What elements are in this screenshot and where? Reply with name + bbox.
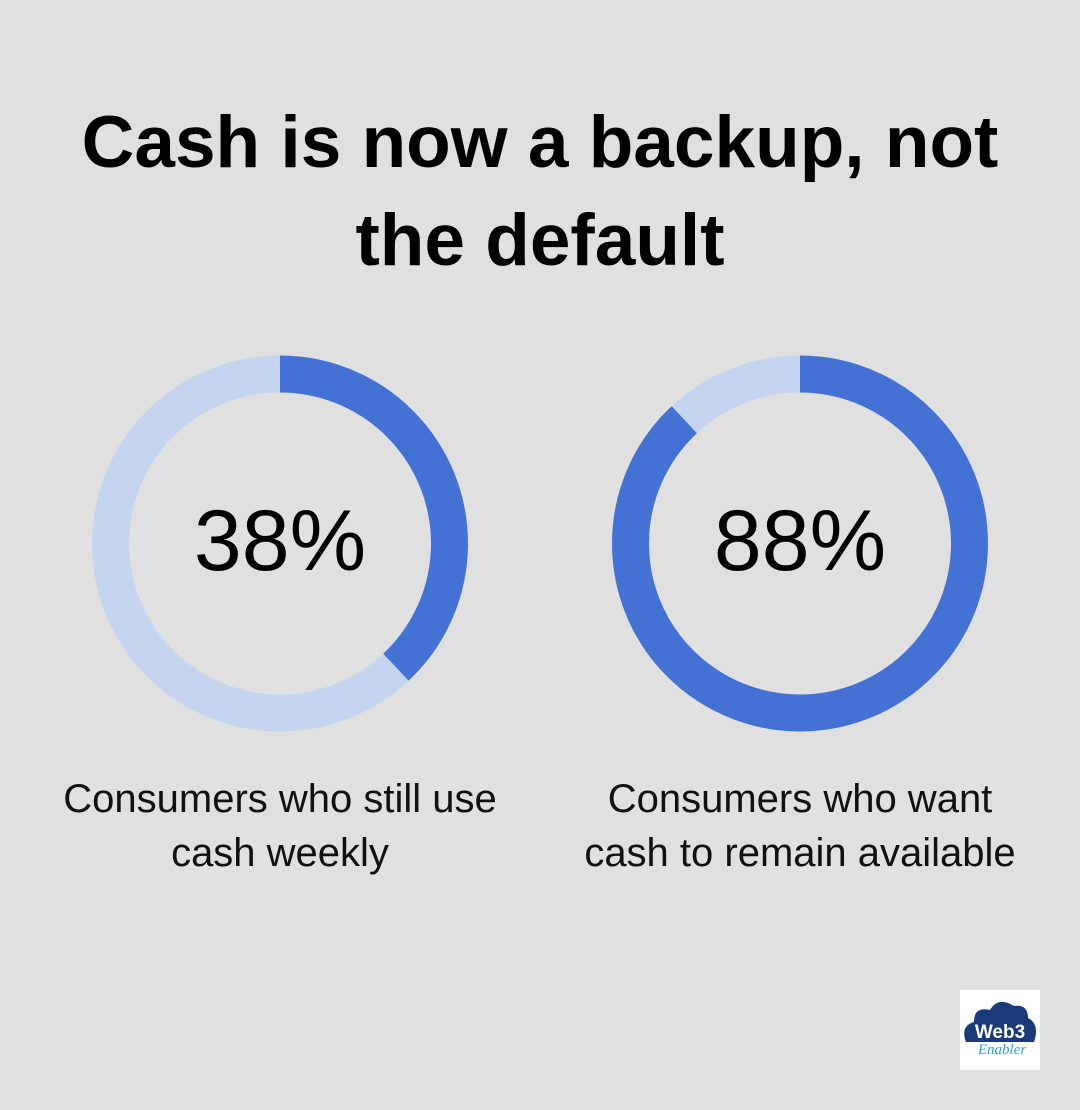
label: left: Consumers who still use (63, 777, 497, 821)
label: right: Consumers who want (608, 777, 992, 821)
label: right (584, 777, 1016, 875)
donut: 88%: 88% (714, 493, 886, 589)
title: Cash is now a backup, not (82, 102, 998, 183)
label: right: cash to remain available (584, 831, 1016, 875)
donut: 38% (110, 374, 450, 713)
logo (960, 990, 1040, 1070)
logo: Web3 (975, 1022, 1025, 1043)
title (82, 102, 998, 281)
donut: 38%: 38% (194, 493, 366, 589)
title: the default (355, 200, 725, 281)
chart: donuts (92, 356, 988, 732)
logo: Enabler (977, 1042, 1026, 1058)
donut: 88% (630, 374, 970, 713)
label: left (63, 777, 497, 875)
label: left: cash weekly (171, 831, 389, 875)
